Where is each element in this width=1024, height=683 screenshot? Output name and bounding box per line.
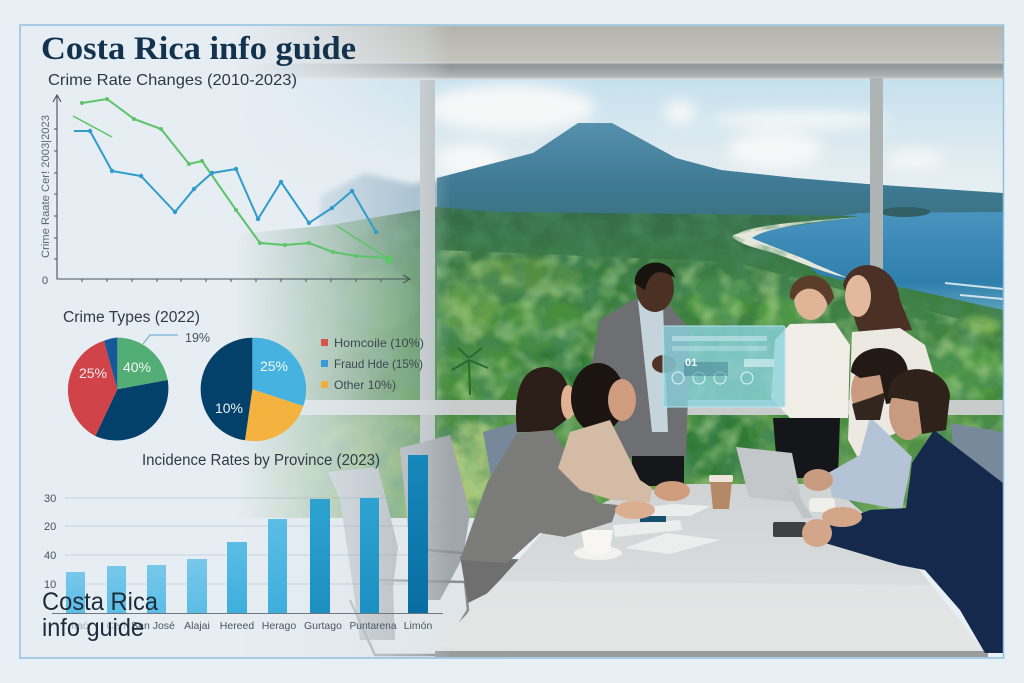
axes: [53, 95, 410, 283]
curly hair: [571, 363, 625, 433]
vertical mullions: [420, 78, 883, 443]
bottom-left caption: [42, 588, 158, 642]
head: [794, 288, 828, 320]
seated woman curly hair: [558, 363, 690, 502]
hair: [888, 369, 950, 434]
white cup and saucer: [574, 530, 622, 560]
beach and surf: [732, 217, 860, 278]
face: [889, 384, 927, 440]
loose papers: [613, 504, 720, 554]
distant mountain: [320, 173, 445, 230]
face: [845, 275, 871, 317]
volcano: [437, 123, 1003, 225]
province labels: Alajai: [184, 620, 210, 632]
trousers: [632, 456, 684, 486]
hair: [851, 348, 908, 404]
tabletop: [435, 484, 988, 657]
province labels: [71, 620, 432, 632]
pie legend: [321, 336, 424, 392]
roller blind: [264, 62, 1003, 80]
beard: [852, 392, 886, 420]
table front edge: [435, 651, 988, 657]
pie legend: Homcoile (10%): [334, 336, 424, 350]
background photo: meeting room with volcano view: [247, 26, 1003, 657]
callout: 19%: 19%: [185, 331, 210, 345]
province labels: Limón: [404, 620, 432, 632]
zero label: 0: [42, 275, 48, 287]
clouds: [425, 84, 945, 176]
left white gradient overlay: [21, 26, 451, 658]
foreground office chair: [328, 435, 470, 656]
y-axis values: 10: [44, 579, 56, 591]
face: [561, 385, 575, 419]
left woman lower body: [460, 556, 530, 603]
bar chart heading: Incidence Rates by Province (2023): [142, 452, 380, 469]
table front band: [435, 581, 985, 650]
left pie chart: 40%: [123, 359, 151, 375]
forest texture dark: [330, 208, 1003, 518]
left pie chart: [68, 338, 168, 440]
front hand: [802, 519, 832, 547]
sea: [730, 212, 1003, 312]
laptop: [736, 447, 802, 503]
pie legend: Fraud Hde (15%): [334, 357, 423, 371]
panel: crime types pies: [63, 309, 424, 441]
green line: [73, 97, 393, 264]
y-axis values: 40: [44, 550, 56, 562]
callout: 19%: [143, 331, 210, 345]
header beam: [270, 26, 1003, 62]
shirt: [828, 417, 912, 510]
hand: [803, 469, 833, 491]
face: [608, 379, 636, 421]
bottom-left caption: Costa Rica: [42, 588, 158, 616]
province labels: San José: [131, 620, 175, 632]
horizontal mullion: [300, 400, 1003, 415]
seated man navy suit: [802, 369, 1003, 653]
second white cup: [809, 498, 835, 512]
main title: Costa Rica info guide: [41, 31, 356, 67]
blue line: [74, 129, 378, 234]
right pie chart: [201, 338, 306, 441]
hand: [615, 501, 655, 519]
suit: [825, 430, 1003, 653]
province labels: Itaó: [71, 620, 89, 632]
tablet held by seated man: [785, 488, 813, 518]
hand: [652, 355, 676, 373]
gridlines: [65, 498, 450, 584]
blouse: [558, 420, 652, 502]
y-axis values: 30: [44, 493, 56, 505]
standing woman with long hair: [843, 265, 934, 458]
bottom-left caption: info guide: [42, 614, 144, 642]
jacket: [460, 430, 618, 563]
coffee cup: [709, 475, 733, 509]
sea foam: [945, 283, 1003, 299]
right pie chart: 25%: [260, 358, 288, 374]
baseline: [52, 612, 443, 614]
shirt: [771, 323, 850, 418]
right pie chart: 10%: [215, 400, 243, 416]
y-axis label: Crime Raate Cer! 2003|2023: [40, 115, 52, 258]
province labels: Puntarena: [350, 620, 397, 632]
hands: [654, 481, 690, 501]
axis ticks: [54, 129, 381, 282]
seated woman left: [460, 367, 655, 563]
province labels: Gurtago: [304, 620, 342, 632]
hair: [843, 265, 912, 335]
province labels: Herago: [262, 620, 296, 632]
hair: [790, 275, 834, 306]
seated man blue shirt: [803, 348, 912, 510]
panel: crime rate line chart: [40, 72, 410, 287]
panel: incidence bar chart: [44, 452, 450, 632]
upper hand: [822, 507, 862, 527]
standing man: [591, 263, 690, 486]
province labels: Hereed: [220, 620, 254, 632]
back chair right: [951, 423, 1003, 483]
hair: [516, 367, 569, 432]
bars: [66, 455, 428, 613]
holographic panel: 01: [685, 357, 697, 369]
holographic panel: [663, 326, 785, 407]
standing woman with tablet: [771, 275, 850, 478]
pies heading: Crime Types (2022): [63, 309, 200, 326]
notebook: [640, 516, 666, 522]
sky: [311, 80, 1003, 162]
shirt: [848, 328, 934, 458]
y-axis values: 20: [44, 521, 56, 533]
province labels: Ceri: [106, 620, 126, 632]
small island: [880, 207, 930, 217]
jacket: [591, 300, 690, 458]
head: [636, 272, 674, 312]
pie legend: Other 10%): [334, 378, 396, 392]
hair: [635, 263, 675, 290]
shirt: [638, 300, 668, 432]
palm tree: [452, 348, 488, 395]
dark tablet on table: [773, 522, 806, 537]
trousers: [773, 418, 840, 478]
back chair left: [483, 422, 518, 476]
tree canopy: [300, 257, 1005, 518]
y-axis values: [44, 493, 56, 591]
forest: [250, 207, 1003, 518]
interior sill and floor: [252, 518, 486, 657]
forest texture light: [437, 250, 1003, 525]
chart heading: Crime Rate Changes (2010-2023): [48, 72, 297, 89]
face: [851, 366, 885, 418]
left pie chart: 25%: [79, 365, 107, 381]
